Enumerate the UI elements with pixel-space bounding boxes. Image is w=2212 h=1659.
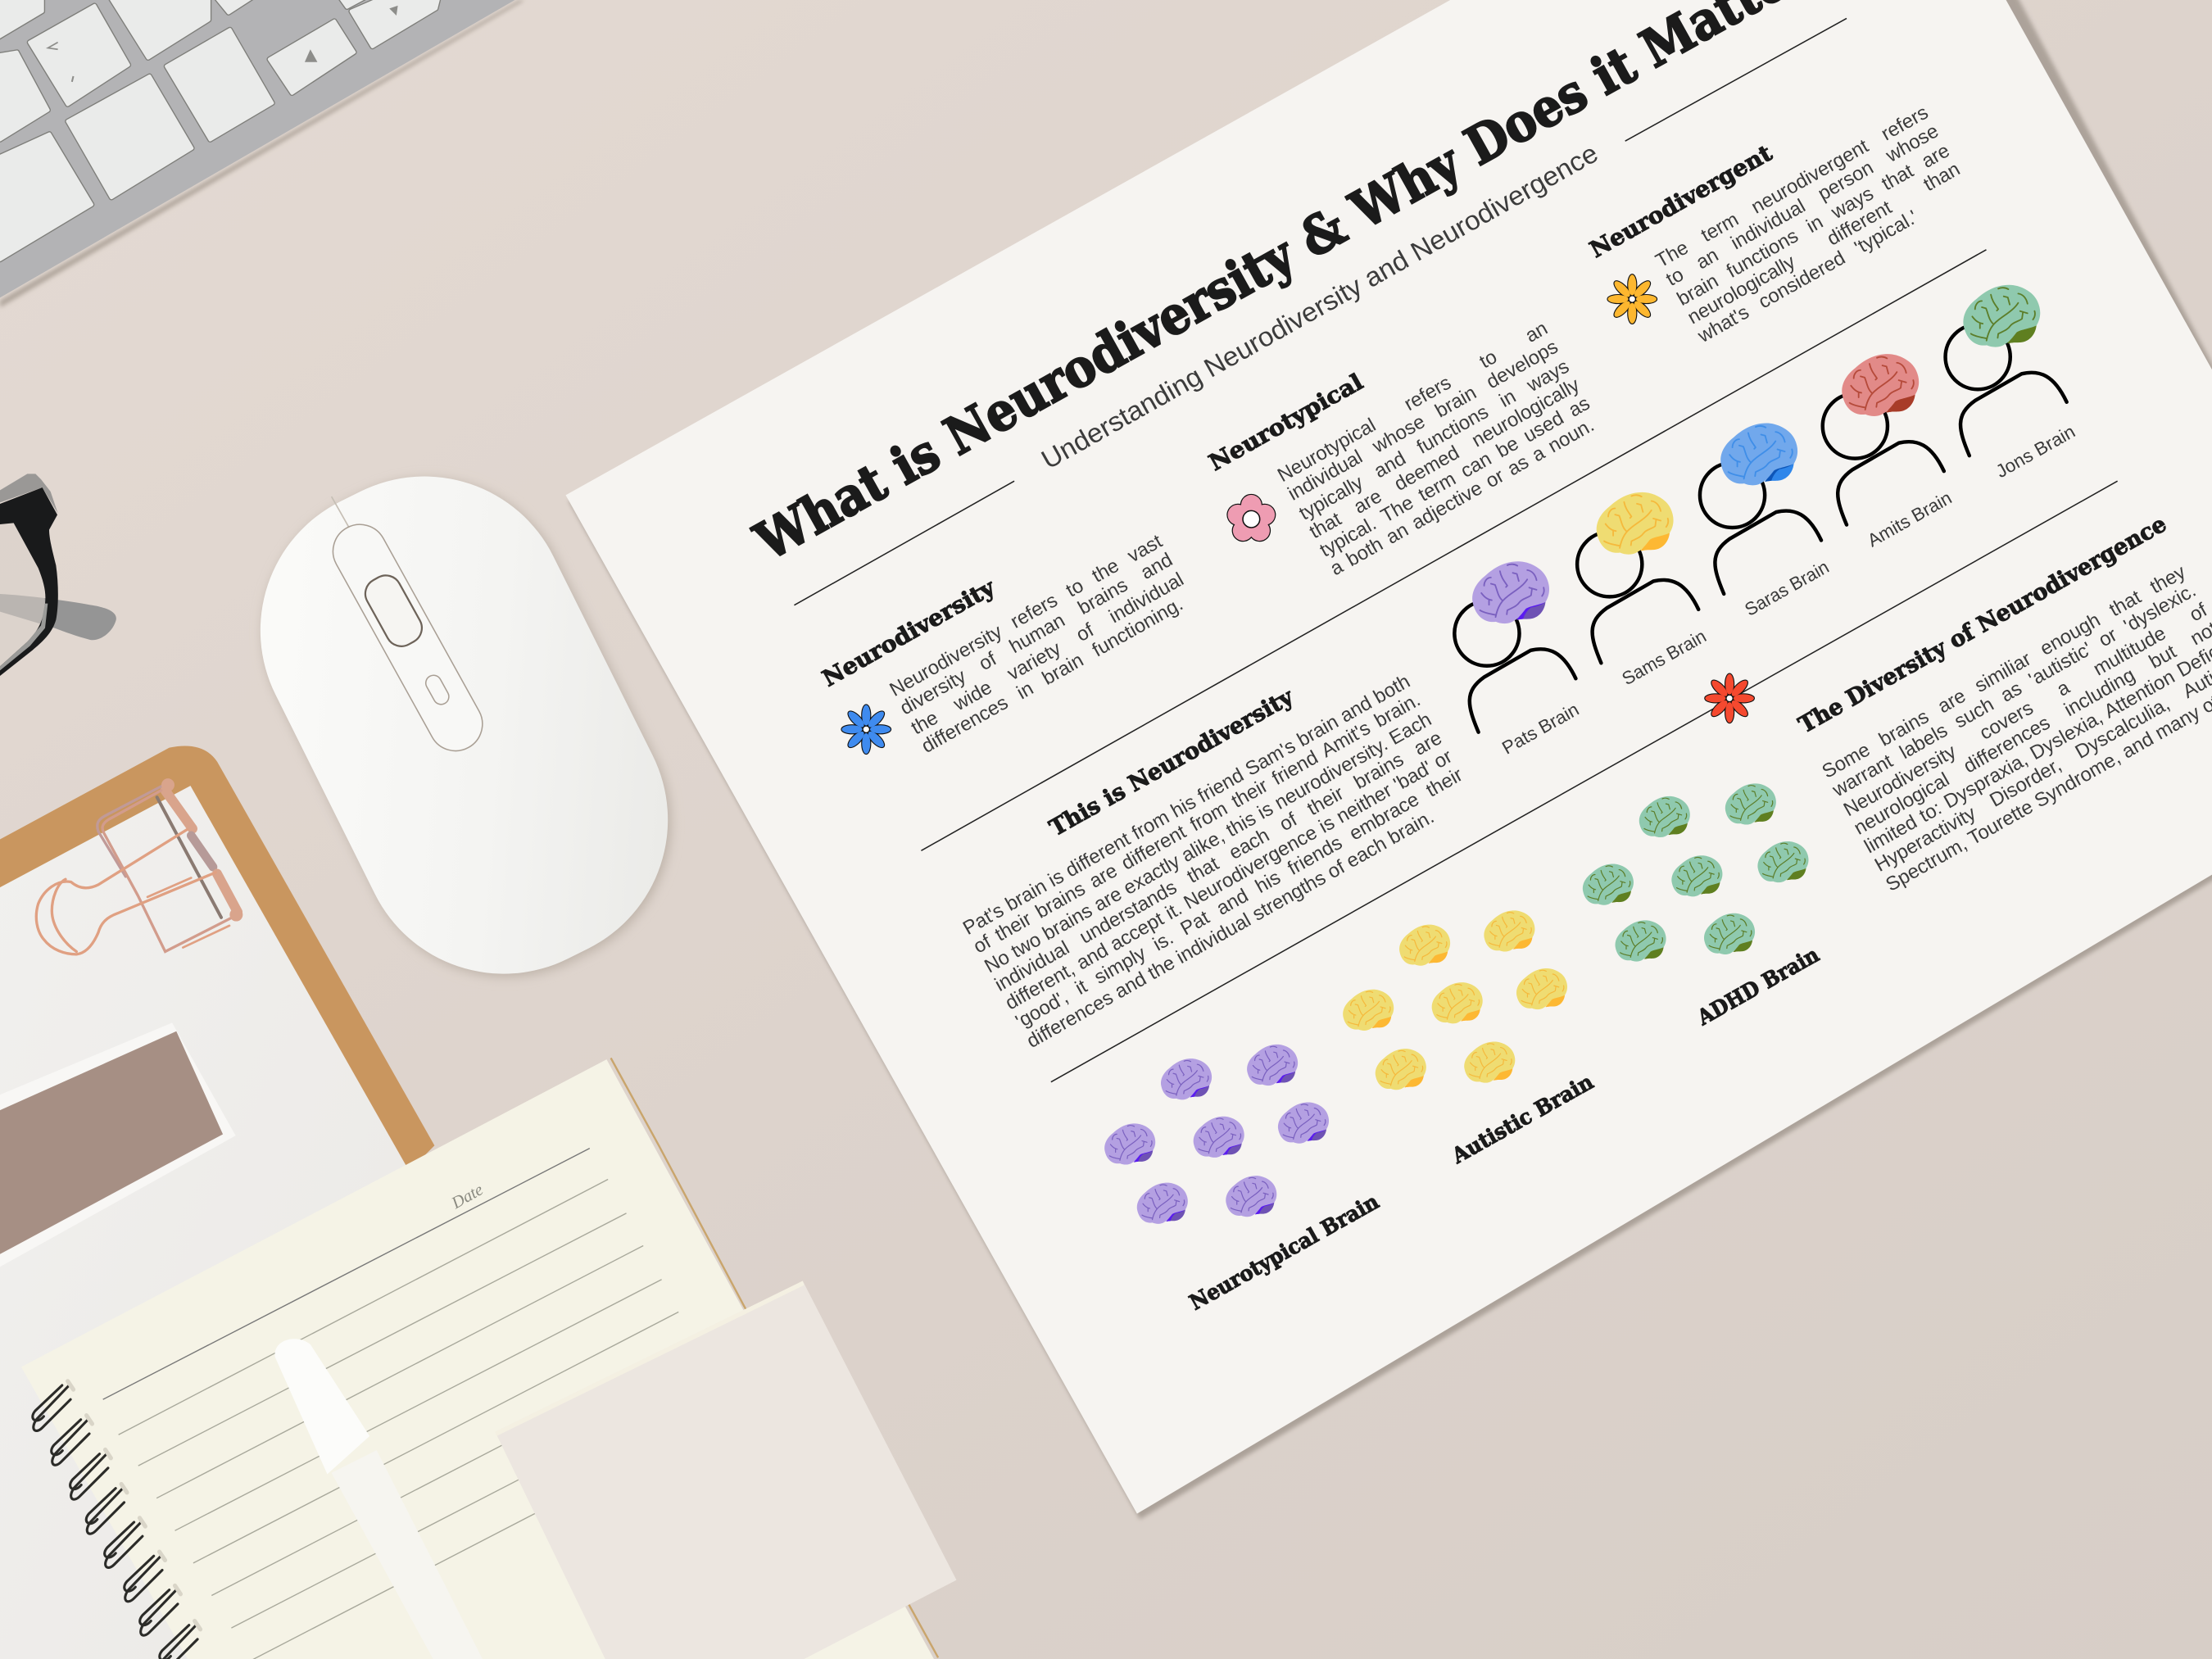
- person: Pat: [1454, 561, 1582, 759]
- person: Amit: Amits Brain: [1864, 487, 1955, 551]
- text block: This is Neurodiversity: individual understands that each of their brains are: [990, 725, 1445, 995]
- text block: Neurodiversity: the wide variety of individual: [907, 566, 1187, 737]
- paper shadow: [569, 0, 2212, 1520]
- icon: blue flower: [841, 705, 891, 754]
- text block: Neurotypical: that are deemed neurologically: [1305, 372, 1583, 542]
- clipboard: [0, 746, 434, 1659]
- pen: [274, 1339, 483, 1659]
- keyboard: [0, 0, 525, 307]
- text block: Neurodivergent: neurologically different than: [1684, 156, 1964, 328]
- label: Autistic Brain: Autistic Brain: [1448, 1070, 1598, 1169]
- text block: Neurodivergent: The term neurodivergent refers: [1652, 100, 1932, 271]
- text block: Neurotypical: typical. The term can be used as: [1316, 391, 1593, 560]
- divider lines: [794, 18, 2118, 1082]
- text block: Neurotypical: Neurotypical refers to an: [1273, 315, 1551, 486]
- icon: pink flower: [1225, 495, 1277, 545]
- yellow brain cluster: [1343, 910, 1567, 1090]
- text block: Neurotypical: [1273, 315, 1598, 579]
- text block: Neurodiversity: Neurodiversity refers to the vast: [886, 528, 1166, 700]
- text block: This is Neurodiversity: Pat's brain is different from his friend Sam's brain and both: [959, 669, 1413, 938]
- text block: The Diversity of Neurodivergence: Neurodiversity covers a multitude of: [1839, 596, 2210, 819]
- binder clip: [36, 778, 243, 954]
- label: ADHD Brain: ADHD Brain: [1693, 943, 1824, 1031]
- glasses: [0, 474, 116, 676]
- green brain cluster: [1583, 783, 1809, 962]
- heading: Neurotypical: Neurotypical: [1204, 369, 1367, 476]
- icon: red flower: [1705, 674, 1754, 723]
- person: Sara: Saras Brain: [1741, 556, 1833, 620]
- text block: Neurotypical: a both an adjective or as a noun.: [1326, 413, 1598, 579]
- text block: Neurodivergent: what's considered 'typical.': [1693, 205, 1921, 347]
- subtitle: Understanding Neurodiversity and Neurodivergence: [1036, 138, 1602, 475]
- text block: The Diversity of Neurodivergence: neurological differences including but not: [1850, 615, 2212, 838]
- text block: The Diversity of Neurodivergence: warrant labels such as 'autistic' or 'dyslexic.: [1829, 578, 2200, 800]
- sticky notes: [495, 1281, 956, 1659]
- paper sheet: [565, 0, 2212, 1514]
- mouse: [211, 428, 720, 1026]
- text block: The Diversity of Neurodivergence: Some brains are similiar enough that they: [1818, 559, 2189, 782]
- text block: This is Neurodiversity: [959, 669, 1466, 1051]
- text block: This is Neurodiversity: differences and the individual strengths of each brain.: [1022, 804, 1437, 1051]
- text block: Neurodivergent: brain functions in ways that are: [1673, 138, 1953, 309]
- person: Amit: [1823, 354, 1955, 551]
- text block: Neurodiversity: differences in brain functioning.: [918, 592, 1186, 756]
- notebook: Date: [448, 1181, 487, 1213]
- person: Jon: [1946, 285, 2078, 482]
- text block: Neurodivergent: to an individual person whose: [1662, 119, 1942, 290]
- text block: Neurotypical: individual whose brain develops: [1284, 334, 1562, 504]
- label: Neurotypical Brain: Neurotypical Brain: [1185, 1190, 1384, 1316]
- person: Sara: [1700, 423, 1833, 620]
- text block: This is Neurodiversity: 'good', it simply is. Pat and his friends embrace their: [1012, 763, 1466, 1032]
- heading: Neurodivergent: Neurodivergent: [1585, 140, 1777, 263]
- heading: The Diversity of Neurodivergence: The Diversity of Neurodivergence: [1794, 510, 2171, 739]
- text block: This is Neurodiversity: of their brains are different from their friend Amit's brain.: [969, 687, 1424, 957]
- person: Pat: Pats Brain: [1498, 699, 1582, 759]
- heading: Neurodiversity: Neurodiversity: [818, 573, 1000, 692]
- person: Sam: Sams Brain: [1619, 626, 1710, 689]
- text block: The Diversity of Neurodivergence: [1818, 559, 2212, 895]
- notebook: [21, 1058, 938, 1659]
- text block: Neurotypical: typically and functions in ways: [1294, 353, 1572, 523]
- heading: This is Neurodiversity: This is Neurodiversity: [1045, 683, 1299, 841]
- text block: Neurodiversity: diversity of human brains and: [896, 547, 1176, 718]
- purple brain cluster: [1104, 1045, 1329, 1224]
- text block: This is Neurodiversity: No two brains are exactly alike, this is neurodiversity. Each: [980, 706, 1435, 976]
- person: Sam: [1577, 492, 1710, 689]
- person: Jon: Jons Brain: [1992, 421, 2078, 482]
- text block: Neurodiversity: [886, 528, 1187, 756]
- icon: yellow flower: [1607, 274, 1657, 324]
- text block: This is Neurodiversity: different, and accept it. Neurodivergence is neither 'bad' or: [1001, 744, 1456, 1013]
- text block: Neurodivergent: [1652, 100, 1964, 347]
